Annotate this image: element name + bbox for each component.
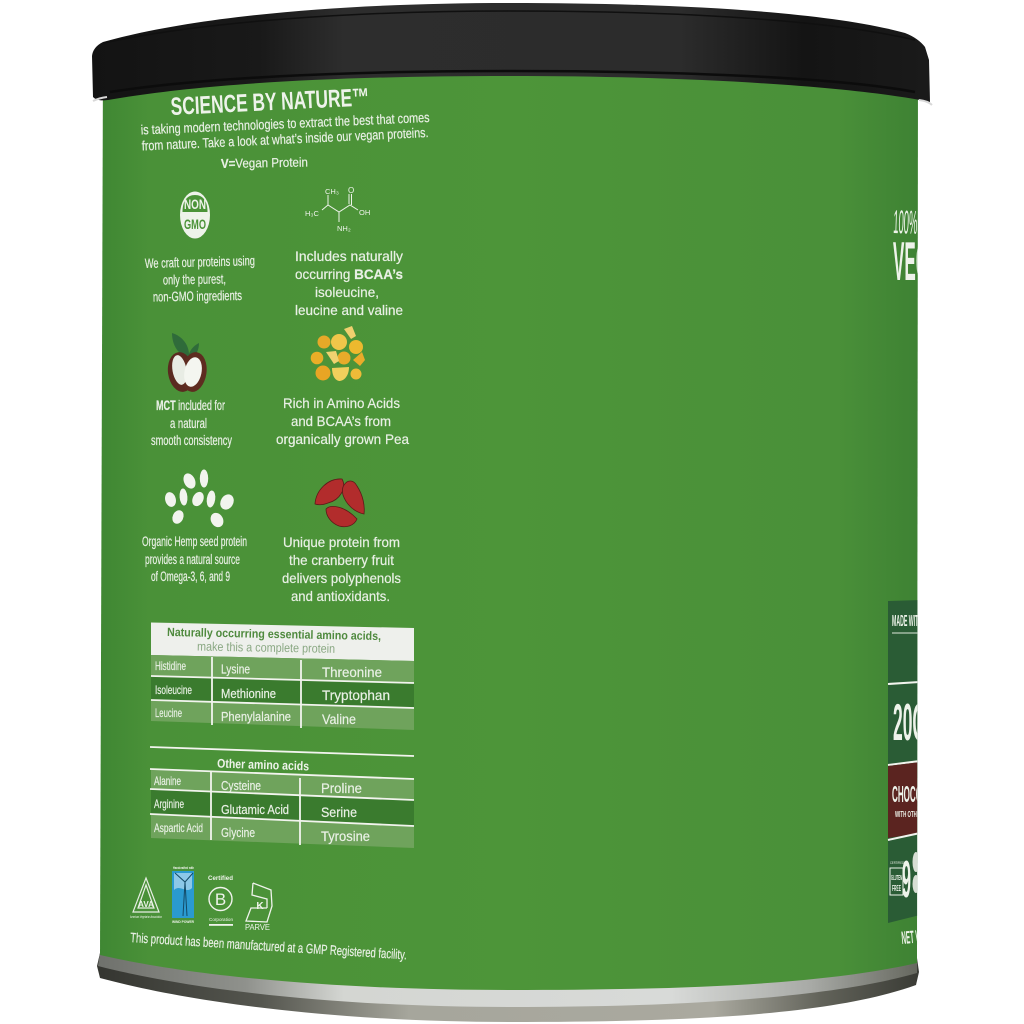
table header xyxy=(151,622,414,661)
table cell text xyxy=(154,774,370,844)
text: pea protein xyxy=(276,395,409,447)
icon: American Vegetarian Association logo: AVA xyxy=(138,900,154,909)
text: BCAA xyxy=(295,248,403,318)
text: CHOCO xyxy=(892,781,922,807)
table cell text: Phenylalanine xyxy=(221,709,291,724)
icon: cranberries xyxy=(315,479,364,527)
icon: amino acid molecule: NH₂ xyxy=(337,224,351,233)
icon: wind power logo: Handcrafted with xyxy=(173,866,194,870)
icon: coconut xyxy=(165,333,209,394)
table header: make this a complete protein xyxy=(197,640,335,656)
icon: certified B corporation logo: Corporation xyxy=(209,917,234,922)
text: MADE WITH xyxy=(892,613,922,630)
icon: hemp seeds xyxy=(163,470,236,529)
text: cranberry: Unique protein from xyxy=(283,534,400,550)
table cell text: Lysine xyxy=(221,662,250,676)
vegan key: V=Vegan Protein xyxy=(221,154,308,171)
text: MCT: a natural xyxy=(170,416,207,431)
text: hemp: Organic Hemp seed protein xyxy=(142,534,247,549)
table cell text: Tyrosine xyxy=(321,828,370,844)
table cell text: Arginine xyxy=(154,797,184,811)
text: BCAA: Includes naturally xyxy=(295,248,403,264)
icon: non-GMO badge: GMO xyxy=(184,216,206,232)
icon: amino acid molecule: O xyxy=(348,186,354,195)
can body xyxy=(100,60,918,990)
metal base rim xyxy=(97,953,919,1022)
text: 100% vegan xyxy=(893,210,918,280)
front label: edge of the can, clipped xyxy=(888,210,918,944)
table rows xyxy=(151,655,414,730)
intro text: is taking modern technologies to extract the best that comes xyxy=(140,110,430,137)
text: GMP statement: This product has been manufactured at a GMP Registered facility. xyxy=(130,930,407,962)
table cell text: Proline xyxy=(321,780,362,796)
icon: non-GMO badge: NON xyxy=(184,196,206,212)
table cell text: Alanine xyxy=(154,774,181,788)
table: other amino acids xyxy=(150,747,414,848)
text: BCAA: occurring BCAA’s xyxy=(295,266,403,282)
gluten free and certification badges: GLUTEN xyxy=(891,875,902,882)
icon: amino acid molecule: H₃C xyxy=(305,209,319,218)
table cell text xyxy=(155,659,390,727)
table cell text: Tryptophan xyxy=(322,687,390,703)
icon: kosher parve logo: K xyxy=(256,901,264,912)
table: essential amino acids xyxy=(151,622,414,730)
table cell text: Cysteine xyxy=(221,778,261,793)
table cell text: Histidine xyxy=(155,659,186,673)
icon: wind power logo: WIND POWER xyxy=(172,919,194,924)
text: MCT: smooth consistency xyxy=(151,433,232,448)
table cell text: Methionine xyxy=(221,686,276,701)
text: MCT xyxy=(151,398,232,448)
table heading: Other amino acids xyxy=(217,757,309,773)
black lid xyxy=(92,3,932,105)
text: NET W xyxy=(901,926,922,948)
intro text: from nature. Take a look at what’s inside our vegan proteins. xyxy=(141,125,429,153)
icon: certified B corporation logo: B xyxy=(215,890,226,909)
table cell text: Glutamic Acid xyxy=(221,802,289,817)
table cell text: Glycine xyxy=(221,825,255,840)
icon: non-GMO badge xyxy=(180,192,210,238)
icon: kosher parve logo xyxy=(245,883,272,932)
heading: Science by Nature: SCIENCE BY NATURE™ xyxy=(170,83,370,121)
icon: amino acid molecule: CH₃ xyxy=(325,187,339,196)
icon: certified B corporation logo: Certified xyxy=(208,875,233,882)
table cell text: Serine xyxy=(321,804,357,820)
text: 100% xyxy=(893,203,918,241)
text: non-GMO: non-GMO ingredients xyxy=(153,288,242,304)
icon: wind power logo xyxy=(172,866,194,924)
text: cranberry xyxy=(282,534,401,604)
brown chocolate band: WITH OTHER xyxy=(895,810,923,819)
dark green label panel xyxy=(888,600,918,923)
brown chocolate band xyxy=(888,762,918,841)
text: pea protein: Rich in Amino Acids xyxy=(283,395,400,411)
text: pea protein: and BCAA’s from xyxy=(291,413,391,429)
icon: amino acid molecule: OH xyxy=(359,208,370,217)
text: non-GMO: We craft our proteins using xyxy=(145,253,255,271)
table rows xyxy=(150,747,414,848)
gluten free and certification badges: FREE xyxy=(892,884,901,893)
icon: American Vegetarian Association logo: American Vegetarian Association xyxy=(130,915,162,919)
text: non-GMO xyxy=(145,253,255,304)
text: cranberry: the cranberry fruit xyxy=(289,552,394,568)
text: pea protein: organically grown Pea xyxy=(276,431,409,447)
text: BCAA: isoleucine, xyxy=(315,284,379,300)
text: 20G xyxy=(893,694,926,752)
table cell text: Threonine xyxy=(322,664,382,680)
text: cranberry: and antioxidants. xyxy=(291,588,390,604)
gluten free and certification badges xyxy=(890,852,918,898)
table header: Naturally occurring essential amino acids, xyxy=(167,625,381,643)
icon: American Vegetarian Association logo xyxy=(130,878,162,919)
text: hemp: of Omega-3, 6, and 9 xyxy=(151,569,230,584)
gluten free and certification badges: 9 xyxy=(902,851,911,909)
table cell text: Leucine xyxy=(155,706,182,720)
table cell text: Isoleucine xyxy=(155,683,192,697)
intro text xyxy=(140,110,430,153)
icon: amino acid molecule xyxy=(305,186,370,233)
text: cranberry: delivers polyphenols xyxy=(282,570,401,586)
text: MCT: MCT included for xyxy=(156,398,225,413)
table cell text: Valine xyxy=(322,711,356,727)
gluten free and certification badges: CERTIFIED xyxy=(890,861,904,865)
text: hemp: provides a natural source xyxy=(145,552,240,567)
icon: certified B corporation logo xyxy=(208,875,234,926)
icon: yellow peas xyxy=(311,326,365,381)
text: BCAA: leucine and valine xyxy=(295,302,403,318)
icon: kosher parve logo: PARVE xyxy=(245,922,270,932)
text: VEG xyxy=(893,230,929,292)
text: hemp xyxy=(142,534,247,584)
text: non-GMO: only the purest, xyxy=(163,271,226,287)
table cell text: Aspartic Acid xyxy=(154,821,203,835)
